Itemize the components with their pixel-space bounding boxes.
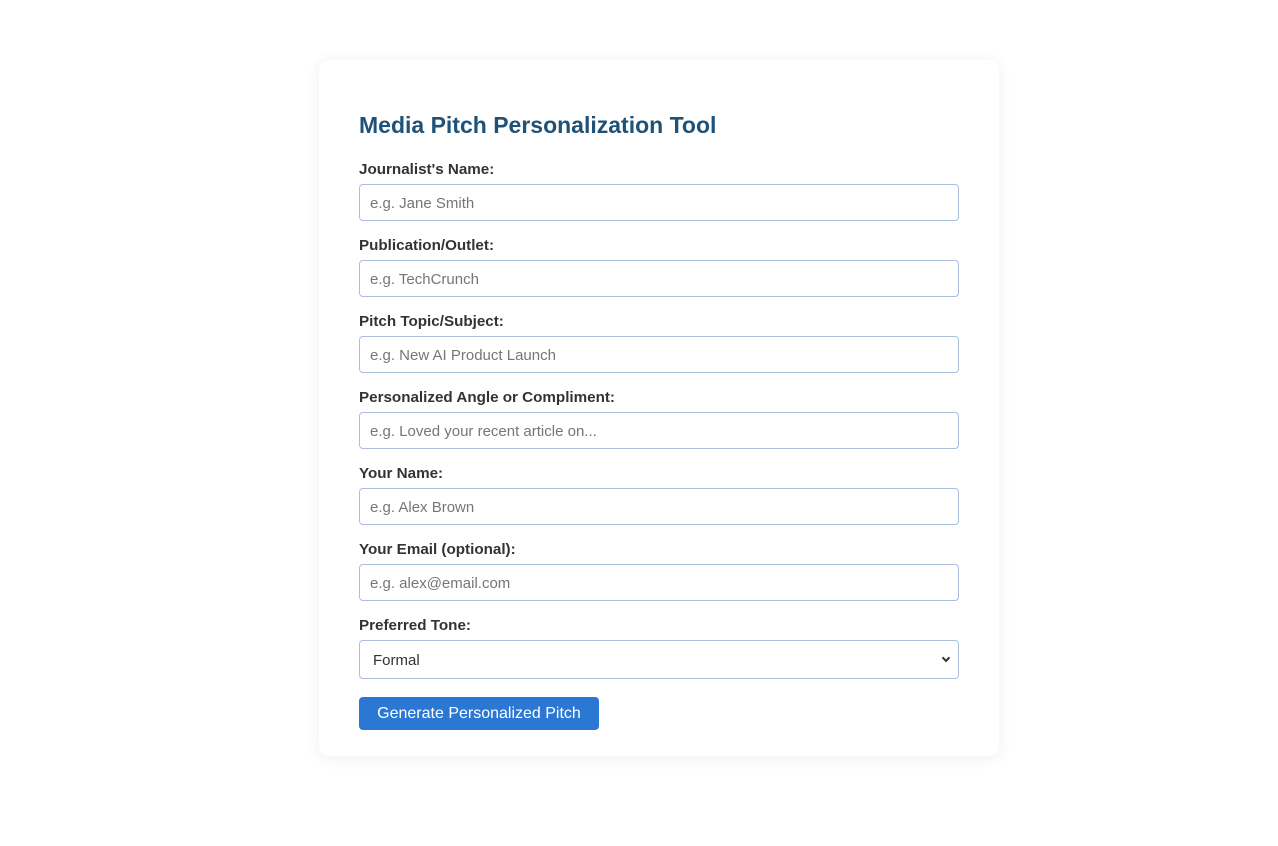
- input: journalist name: e.g. Jane Smith: [370, 195, 474, 212]
- label: your name: Your Name:: [359, 465, 443, 482]
- input: journalist name: [359, 184, 959, 221]
- input: email: [359, 564, 959, 601]
- input: angle: e.g. Loved your recent article on...: [370, 423, 597, 440]
- input: your name: e.g. Alex Brown: [370, 499, 474, 516]
- input: your name: [359, 488, 959, 525]
- input: publication: [359, 260, 959, 297]
- title: Media Pitch Personalization Tool: [359, 112, 716, 138]
- label: tone: Preferred Tone:: [359, 617, 471, 634]
- button: generate: [359, 697, 599, 730]
- input: angle: [359, 412, 959, 449]
- input: email: e.g. alex@email.com: [370, 575, 510, 592]
- label: angle: Personalized Angle or Compliment:: [359, 389, 615, 406]
- button: generate: Generate Personalized Pitch: [377, 705, 581, 722]
- label: email: Your Email (optional):: [359, 541, 516, 558]
- input: topic: e.g. New AI Product Launch: [370, 347, 556, 364]
- label: journalist name: Journalist's Name:: [359, 161, 494, 178]
- label: publication: Publication/Outlet:: [359, 237, 494, 254]
- label: topic: Pitch Topic/Subject:: [359, 313, 504, 330]
- input: publication: e.g. TechCrunch: [370, 271, 479, 288]
- select: tone: [359, 640, 959, 679]
- panel: form card: [319, 60, 999, 756]
- select: tone: Formal: [373, 652, 420, 669]
- input: topic: [359, 336, 959, 373]
